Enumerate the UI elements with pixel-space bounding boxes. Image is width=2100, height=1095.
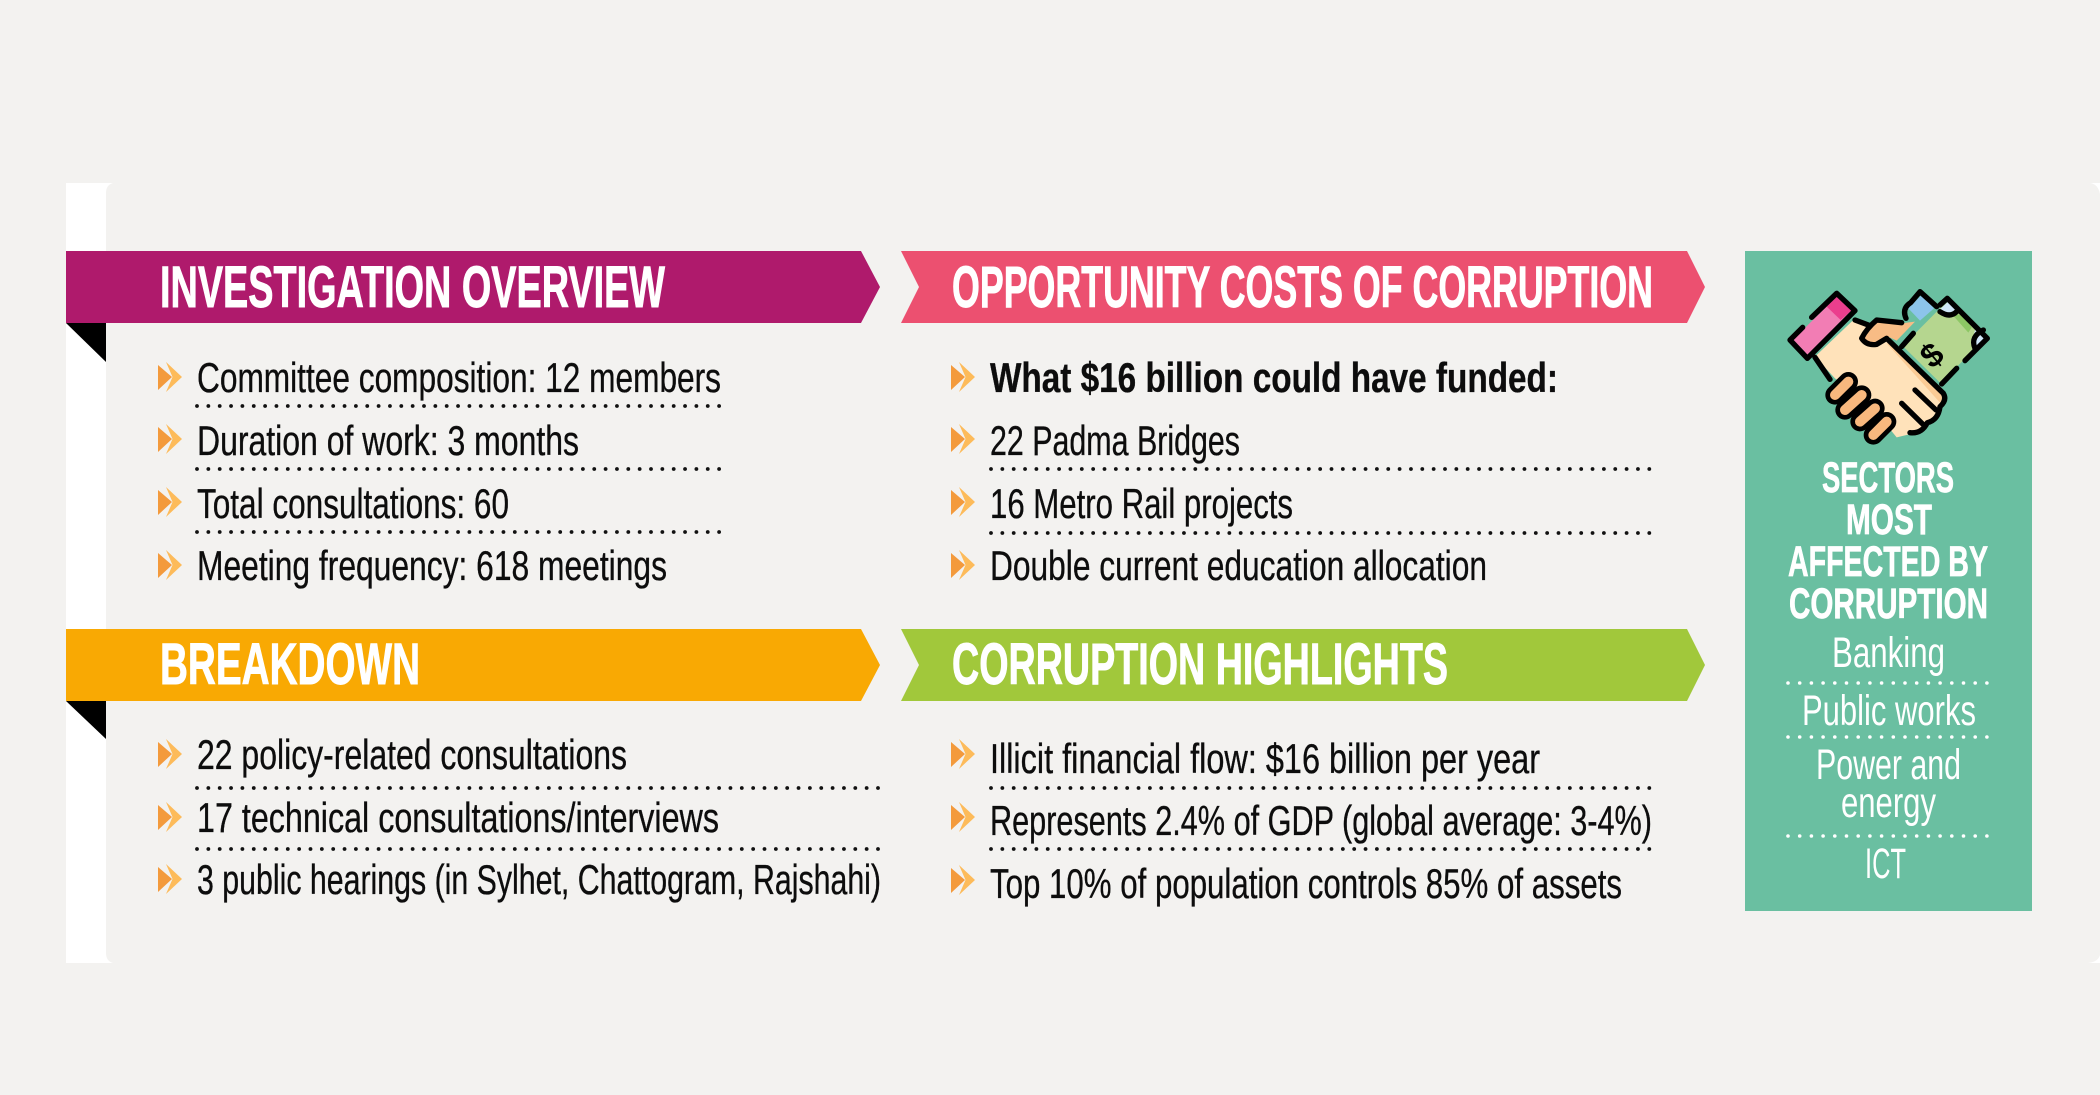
banner: breakdown — [66, 629, 880, 739]
list: investigation facts: Committee composition: 12 members — [197, 354, 721, 401]
heading: sectors most affected by corruption: SECTORS — [1822, 454, 1954, 502]
panel: corruption highlights — [901, 629, 1705, 907]
list: opportunity costs items — [951, 354, 1652, 589]
icon: corrupt handshake with money: $ — [1913, 335, 1952, 376]
panel: sectors most affected — [1745, 251, 2032, 911]
banner: breakdown: BREAKDOWN — [160, 632, 420, 697]
panel: breakdown — [66, 629, 881, 903]
list: corruption highlights items: Illicit financial flow: $16 billion per year — [990, 735, 1540, 782]
list: investigation facts: Duration of work: 3 months — [197, 417, 579, 464]
heading: sectors most affected by corruption — [1788, 454, 1988, 628]
icon: corrupt handshake with money — [1790, 292, 1987, 437]
list: affected sectors: ICT — [1865, 840, 1906, 888]
banner: investigation overview: INVESTIGATION OVERVIEW — [160, 255, 665, 320]
list: investigation facts: Meeting frequency: 618 meetings — [197, 542, 667, 589]
banner: investigation overview — [66, 251, 880, 362]
list: breakdown items: 3 public hearings (in Sylhet, Chattogram, Rajshahi) — [197, 856, 881, 903]
list: corruption highlights items: Represents 2.4% of GDP (global average: 3-4%) — [990, 797, 1652, 844]
list: affected sectors: Power and — [1816, 741, 1961, 789]
list: investigation facts: Total consultations: 60 — [197, 480, 509, 527]
banner: opportunity costs: OPPORTUNITY COSTS OF CORRUPTION — [952, 255, 1653, 320]
list: affected sectors — [1788, 629, 1989, 888]
panel: investigation overview — [66, 251, 880, 589]
list: investigation facts — [158, 354, 722, 589]
list: corruption highlights items: Top 10% of population controls 85% of assets — [990, 860, 1622, 907]
panel: opportunity costs — [901, 251, 1705, 589]
heading: sectors most affected by corruption: MOST — [1846, 496, 1932, 544]
list: breakdown items — [158, 731, 881, 903]
banner: opportunity costs — [901, 251, 1705, 323]
banner: corruption highlights: CORRUPTION HIGHLIGHTS — [952, 632, 1448, 697]
list: affected sectors: Public works — [1802, 687, 1976, 735]
heading: sectors most affected by corruption: AFFECTED BY — [1788, 538, 1988, 586]
list: opportunity costs items: 16 Metro Rail projects — [990, 480, 1293, 527]
list: breakdown items: 17 technical consultations/interviews — [197, 794, 719, 841]
list: affected sectors: Banking — [1832, 629, 1945, 677]
list: opportunity costs items: What $16 billion could have funded: — [990, 354, 1558, 401]
heading: sectors most affected by corruption: CORRUPTION — [1789, 580, 1988, 628]
list: opportunity costs items: 22 Padma Bridges — [990, 417, 1240, 464]
list: opportunity costs items: Double current education allocation — [990, 542, 1487, 589]
list: breakdown items: 22 policy-related consultations — [197, 731, 627, 778]
list: corruption highlights items — [951, 735, 1652, 907]
list: affected sectors: energy — [1841, 779, 1936, 827]
white frame strip — [66, 183, 2100, 963]
